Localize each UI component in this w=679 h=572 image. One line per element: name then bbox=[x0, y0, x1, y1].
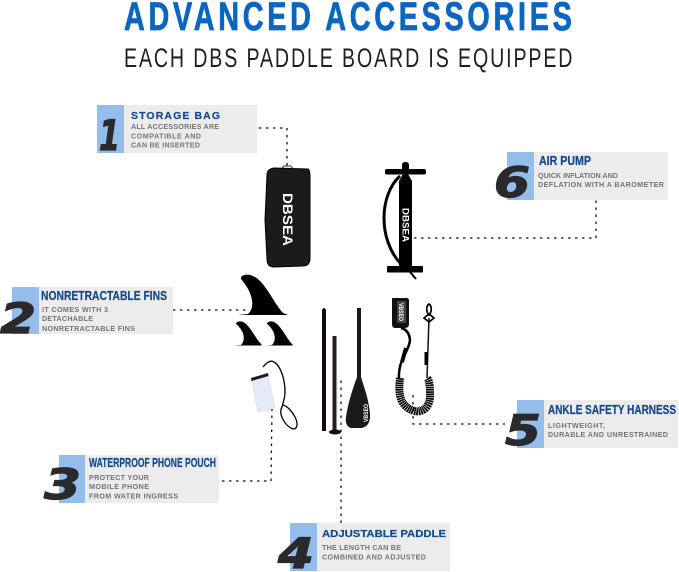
description: FROM WATER INGRESS bbox=[89, 492, 178, 500]
subtitle: EACH DBS PADDLE BOARD IS EQUIPPED bbox=[124, 43, 572, 73]
icon: air pump: DBSEA bbox=[400, 208, 410, 242]
description: THE LENGTH CAN BE bbox=[322, 543, 401, 552]
heading: WATERPROOF PHONE POUCH bbox=[89, 456, 216, 470]
connector: ankle harness bbox=[413, 395, 505, 424]
shaft section bbox=[322, 308, 326, 431]
icon: storage bag: DBSEA bbox=[280, 193, 295, 246]
description: ALL ACCESSORIES ARE bbox=[131, 122, 219, 131]
panel: adjustable paddle bbox=[277, 523, 450, 572]
panel: storage bag bbox=[97, 105, 257, 160]
panel: nonretractable fins bbox=[0, 287, 173, 343]
description: DETACHABLE bbox=[42, 314, 93, 323]
description: DURABLE AND UNRESTRAINED bbox=[548, 430, 668, 439]
heading: AIR PUMP bbox=[539, 154, 591, 168]
hook loop bbox=[424, 304, 434, 322]
number 3: 3 bbox=[44, 460, 81, 509]
icon: paddle bbox=[322, 308, 370, 434]
description bbox=[538, 171, 665, 189]
description bbox=[42, 305, 135, 333]
description bbox=[322, 543, 426, 562]
description: QUICK INFLATION AND bbox=[538, 171, 618, 180]
description: DEFLATION WITH A BAROMETER bbox=[538, 180, 665, 189]
description bbox=[131, 122, 219, 150]
icon: ankle harness: VBSEO bbox=[397, 303, 404, 321]
description: LIGHTWEIGHT, bbox=[548, 421, 605, 430]
number 1: 1 bbox=[99, 111, 120, 160]
description: MOBILE PHONE bbox=[89, 482, 149, 491]
panel: air pump bbox=[494, 152, 668, 207]
description: NONRETRACTABLE FINS bbox=[42, 324, 135, 333]
coiled cord bbox=[399, 378, 430, 411]
panel: waterproof phone pouch bbox=[44, 455, 219, 509]
number 5: 5 bbox=[505, 406, 541, 455]
description bbox=[89, 473, 178, 500]
large fin bbox=[238, 275, 288, 315]
description bbox=[548, 421, 668, 439]
heading: STORAGE BAG bbox=[131, 110, 220, 122]
connector: air pump bbox=[414, 200, 596, 238]
description: PROTECT YOUR bbox=[89, 473, 150, 482]
small fin right bbox=[267, 321, 293, 346]
heading: NONRETRACTABLE FINS bbox=[41, 289, 167, 303]
small fin left bbox=[234, 321, 262, 346]
icon: fins bbox=[234, 275, 293, 346]
lower section with foot bbox=[332, 336, 336, 430]
heading: ADJUSTABLE PADDLE bbox=[322, 528, 446, 540]
connector: paddle bbox=[340, 380, 342, 523]
number 6: 6 bbox=[494, 158, 530, 207]
icon: air pump bbox=[384, 162, 426, 279]
description: COMPATIBLE AND bbox=[131, 132, 201, 140]
description: CAN BE INSERTED bbox=[131, 140, 200, 150]
connector: phone pouch bbox=[222, 408, 272, 481]
connector: storage bag bbox=[259, 128, 287, 192]
number 2: 2 bbox=[0, 294, 36, 343]
description: IT COMES WITH 3 bbox=[42, 305, 108, 314]
icon: ankle harness bbox=[392, 298, 434, 411]
blade section bbox=[346, 308, 370, 428]
icon: paddle: VBSEO bbox=[363, 404, 370, 422]
panel: ankle safety harness bbox=[505, 400, 678, 455]
connector: fins bbox=[173, 309, 246, 311]
description: COMBINED AND ADJUSTED bbox=[322, 552, 426, 562]
icon: storage bag bbox=[265, 166, 310, 267]
icon: phone pouch bbox=[251, 361, 297, 429]
